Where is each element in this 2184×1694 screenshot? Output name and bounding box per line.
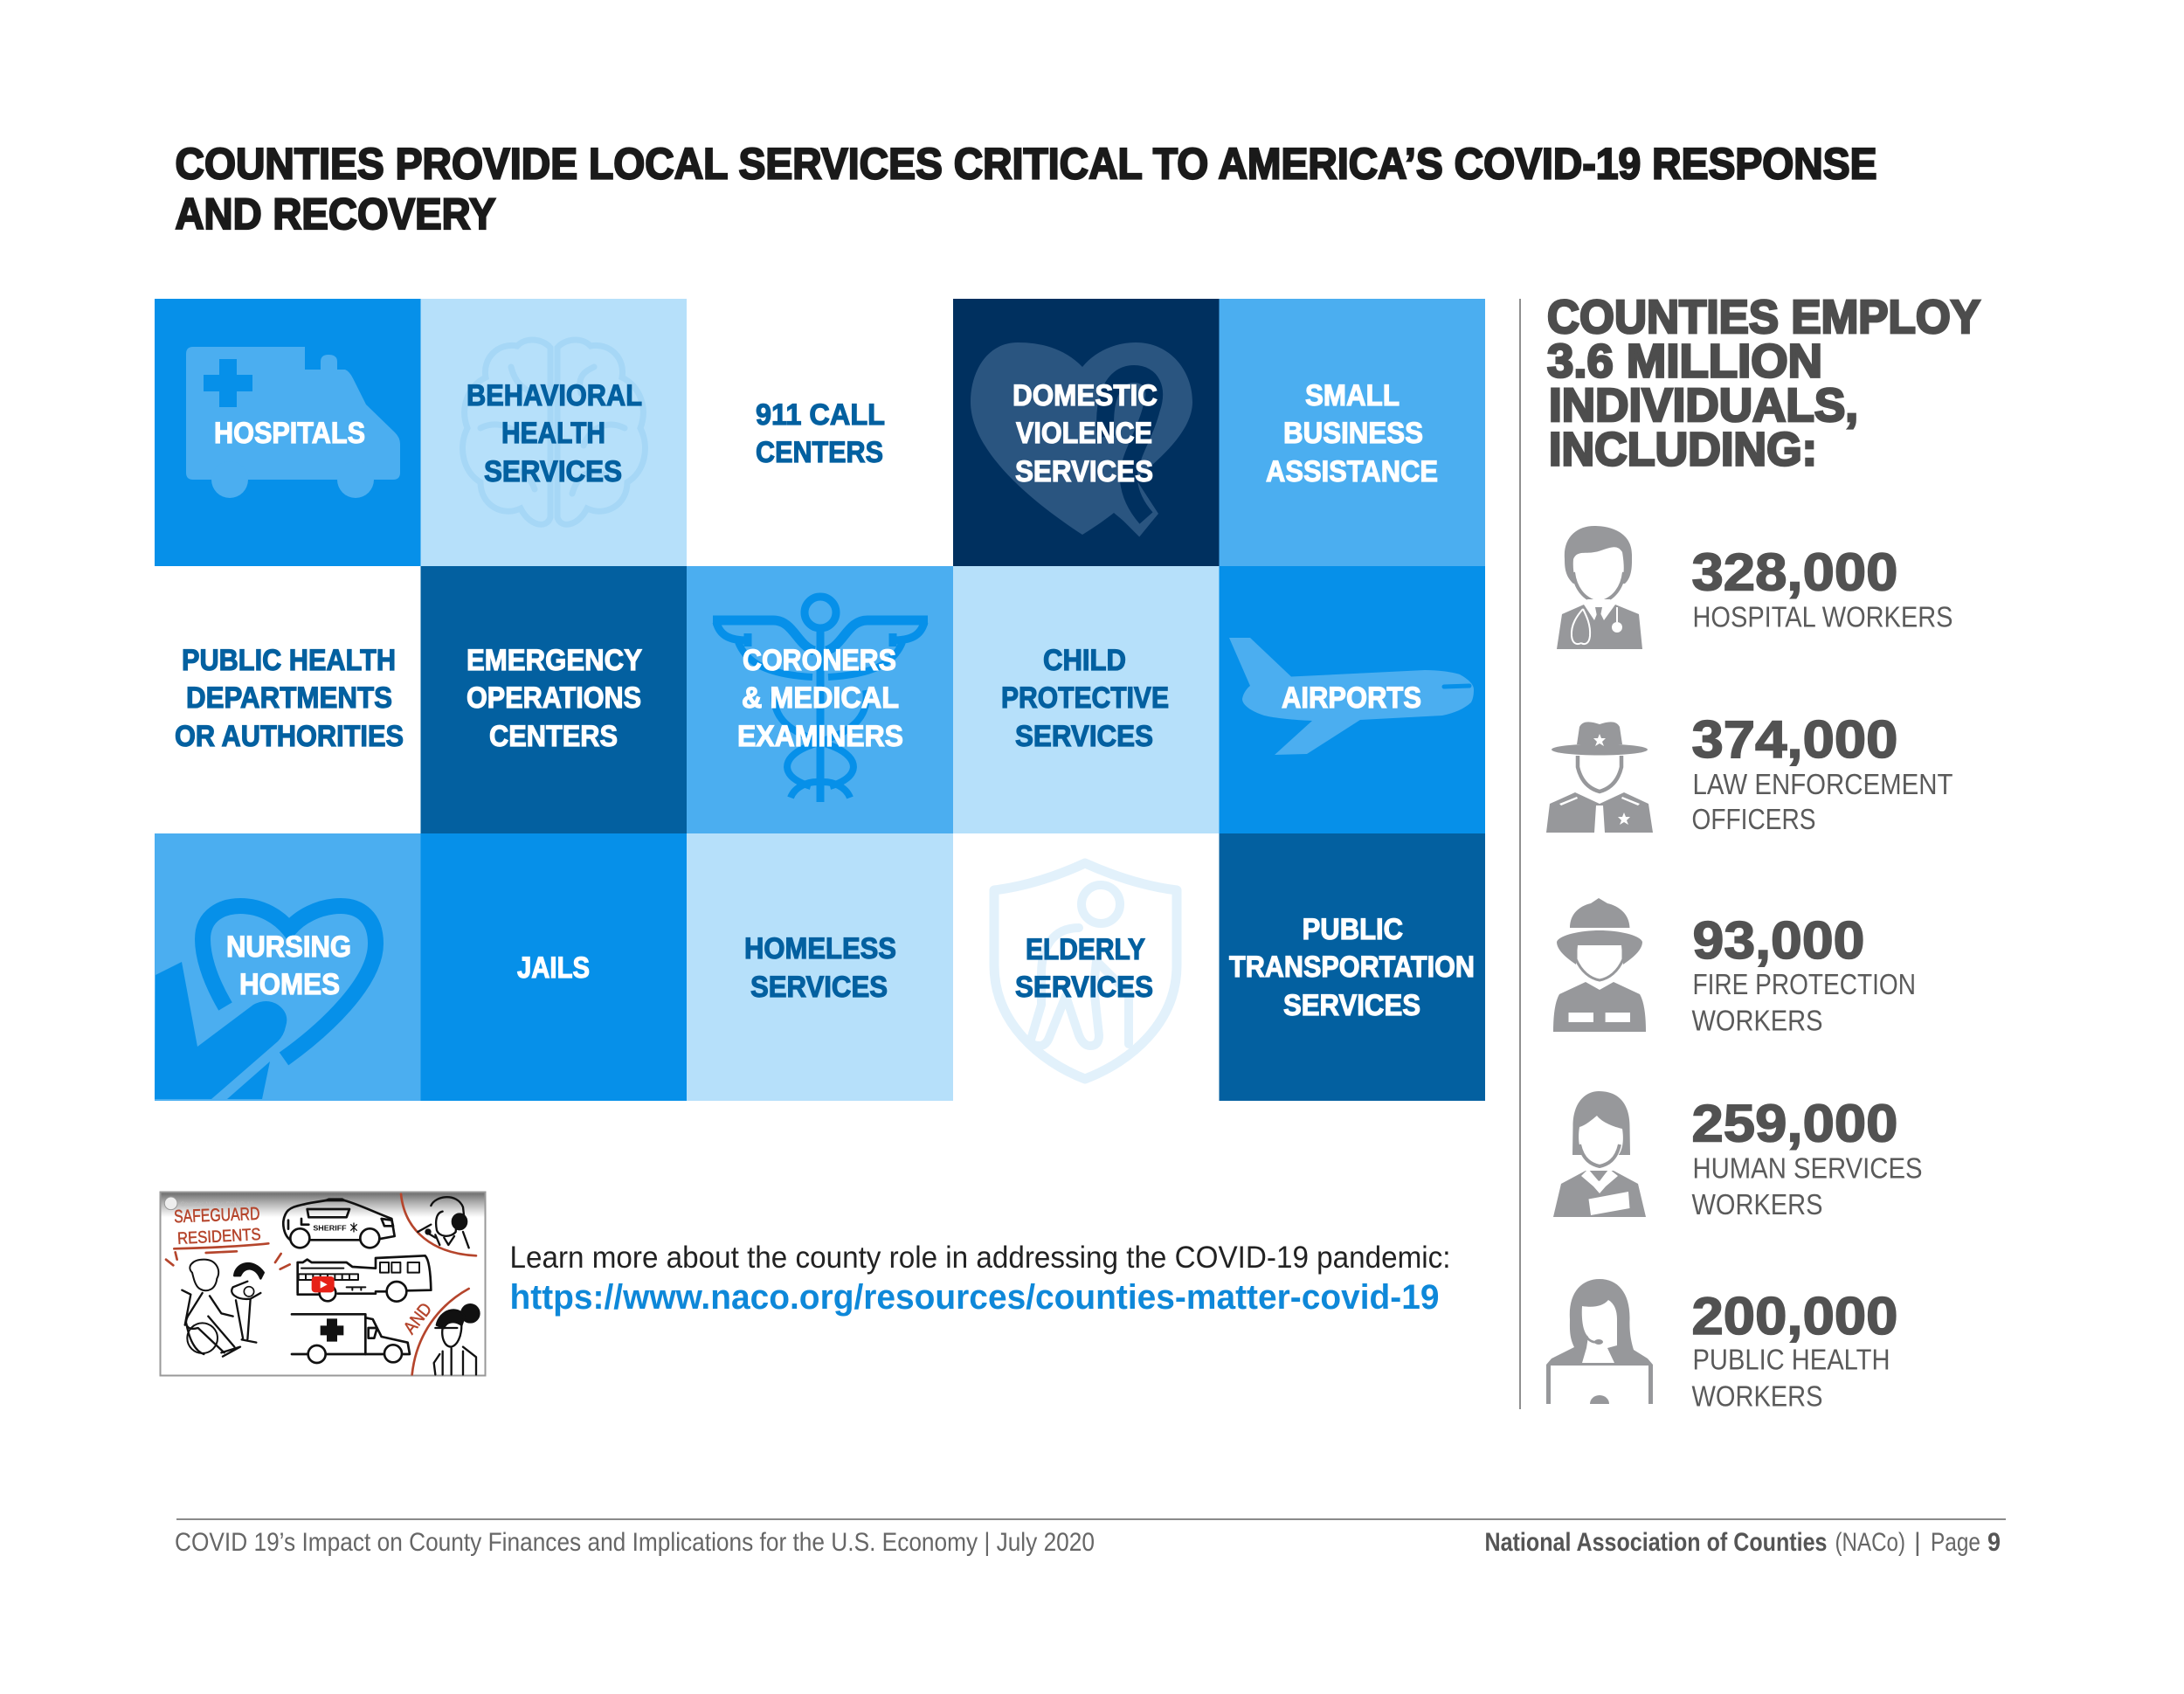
tile: emergency operations: OPERATIONS [467,681,641,715]
stat: law enforcement officers [1546,710,1953,835]
tile: jails: JAILS [517,951,590,985]
panel: county services grid [155,299,1485,1101]
tile: child protective [953,566,1220,833]
divider line [1519,299,1521,1409]
tile: 911 call centers: CENTERS [756,436,883,469]
stat: human services workers [1553,1091,1922,1220]
tile: emergency operations: CENTERS [489,720,618,753]
tile: public health departments: DEPARTMENTS [186,681,392,715]
tile: 911 call centers [756,398,885,469]
value: 328,000 [1691,543,1897,601]
value: 200,000 [1691,1287,1897,1345]
tile: small business: SMALL [1305,379,1400,412]
tile: emergency operations [421,566,687,833]
label: nursing homes: NURSING [226,930,351,964]
stat: public health workers [1546,1279,1897,1412]
text block: learn more with link: https://www.naco.org/resources/counties-matter-covid-19 [510,1278,1440,1317]
label: behavioral health services: SERVICES [484,455,622,488]
label: hospitals: HOSPITALS [214,417,365,450]
value: 93,000 [1693,911,1864,970]
label: elderly services: ELDERLY [1026,933,1145,966]
label: airports: AIRPORTS [1282,681,1421,715]
caption [1691,968,1916,1036]
tile: homeless services [687,833,953,1101]
heading: counties employ [1547,291,1980,475]
icon: shield with elderly person [994,863,1177,1079]
stat: fire protection workers [1553,898,1916,1036]
footer [175,1519,2006,1557]
video thumbnail: AND [399,1299,436,1338]
title: COUNTIES PROVIDE LOCAL SERVICES CRITICAL TO AMERICA’S COVID-19 RESPONSE [175,140,1876,189]
tile: child protective: SERVICES [1015,720,1153,753]
label: coroners & medical examiners [737,644,903,753]
footer: National Association of Counties [1485,1528,1828,1557]
label: domestic violence services: VIOLENCE [1016,417,1152,450]
caption: FIRE PROTECTION [1693,968,1916,1000]
heading: counties employ: INCLUDING: [1549,423,1817,475]
caption: HUMAN SERVICES [1693,1151,1922,1185]
icon: heart with ribbon [971,342,1192,535]
label: behavioral health services: BEHAVIORAL [467,379,642,412]
heading: counties employ: COUNTIES EMPLOY [1547,291,1980,343]
icon: heart and hand [155,906,376,1099]
icon: doctor [1557,526,1642,649]
tile: homeless services: SERVICES [750,971,888,1004]
heading: counties employ: INDIVIDUALS, [1549,379,1858,432]
footer: 9 [1987,1528,2001,1557]
tile: child protective: CHILD [1043,644,1126,677]
label: nursing homes [226,930,351,1001]
tile: coroners [687,566,953,833]
icon: sheriff [1546,722,1653,833]
tile: public transportation: PUBLIC [1303,913,1403,946]
label: domestic violence services: SERVICES [1015,455,1153,488]
label: domestic violence services [1013,379,1158,488]
tile: domestic violence [953,299,1220,566]
footer: | [1914,1528,1921,1557]
tile: behavioral health [421,299,687,566]
tile: small business: BUSINESS [1283,417,1423,450]
label: coroners & medical examiners: & MEDICAL [742,681,899,715]
title [175,140,1876,239]
tile: homeless services: HOMELESS [744,932,896,965]
tile: jails [421,833,687,1101]
text block: learn more with link [510,1241,1450,1317]
footer: COVID 19’s Impact on County Finances and Implications for the U.S. Economy | July 2020 [175,1528,1095,1557]
tile: 911 call centers: 911 CALL [756,398,885,432]
caption [1691,1151,1922,1220]
label: coroners & medical examiners: CORONERS [743,644,896,677]
icon: call center worker with laptop [1546,1279,1653,1404]
tile: public transportation [1220,833,1485,1101]
value: 374,000 [1691,710,1897,769]
caption: WORKERS [1691,1188,1822,1220]
tile: emergency operations: EMERGENCY [467,644,642,677]
stat: hospital workers [1557,526,1953,649]
label: elderly services [1015,933,1153,1004]
caption [1691,1344,1890,1412]
text block: learn more with link: Learn more about the county role in addressing the COVID-19 pandemic: [510,1241,1450,1275]
footer: (NACo) [1835,1528,1905,1557]
icon: firefighter [1553,898,1646,1032]
heading: counties employ: 3.6 MILLION [1547,335,1822,388]
icon: ambulance [186,347,400,498]
tile: airports [1220,566,1485,833]
video thumbnail: RESIDENTS [176,1226,261,1248]
tile: public health departments [175,644,404,753]
tile: small business [1220,299,1485,566]
label: coroners & medical examiners: EXAMINERS [737,720,903,753]
tile: nursing homes [155,833,421,1101]
caption: PUBLIC HEALTH [1693,1344,1890,1375]
tile: public health departments: PUBLIC HEALTH [182,644,396,677]
icon: brain [463,340,645,524]
tile: hospitals [155,299,421,566]
caption: WORKERS [1691,1005,1822,1036]
caption: OFFICERS [1691,803,1815,835]
tile: elderly services [994,863,1177,1079]
caption: LAW ENFORCEMENT [1693,768,1953,800]
label: behavioral health services [467,379,642,488]
label: nursing homes: HOMES [239,968,340,1001]
caption: WORKERS [1691,1380,1822,1412]
video thumbnail [161,1192,486,1375]
caption: HOSPITAL WORKERS [1693,601,1953,633]
icon: female worker with badge [1553,1091,1646,1217]
value: 259,000 [1691,1094,1897,1153]
video thumbnail: Counties Matter: COVID-19 [181,1200,253,1208]
tile: public transportation: SERVICES [1283,989,1420,1022]
tile: public health departments: OR AUTHORITIES [175,720,404,753]
tile: small business: ASSISTANCE [1266,455,1438,488]
icon: airplane [1229,638,1474,755]
video thumbnail: SHERIFF [313,1225,347,1233]
label: behavioral health services: HEALTH [501,417,605,450]
label: domestic violence services: DOMESTIC [1013,379,1158,412]
footer: Page [1931,1528,1980,1557]
tile: child protective: PROTECTIVE [1001,681,1169,715]
caption [1691,768,1953,835]
icon: caduceus [713,597,928,802]
tile: public transportation: TRANSPORTATION [1229,951,1475,984]
title: AND RECOVERY [175,190,496,239]
label: elderly services: SERVICES [1015,971,1153,1004]
video thumbnail: SAFEGUARD [174,1204,260,1227]
